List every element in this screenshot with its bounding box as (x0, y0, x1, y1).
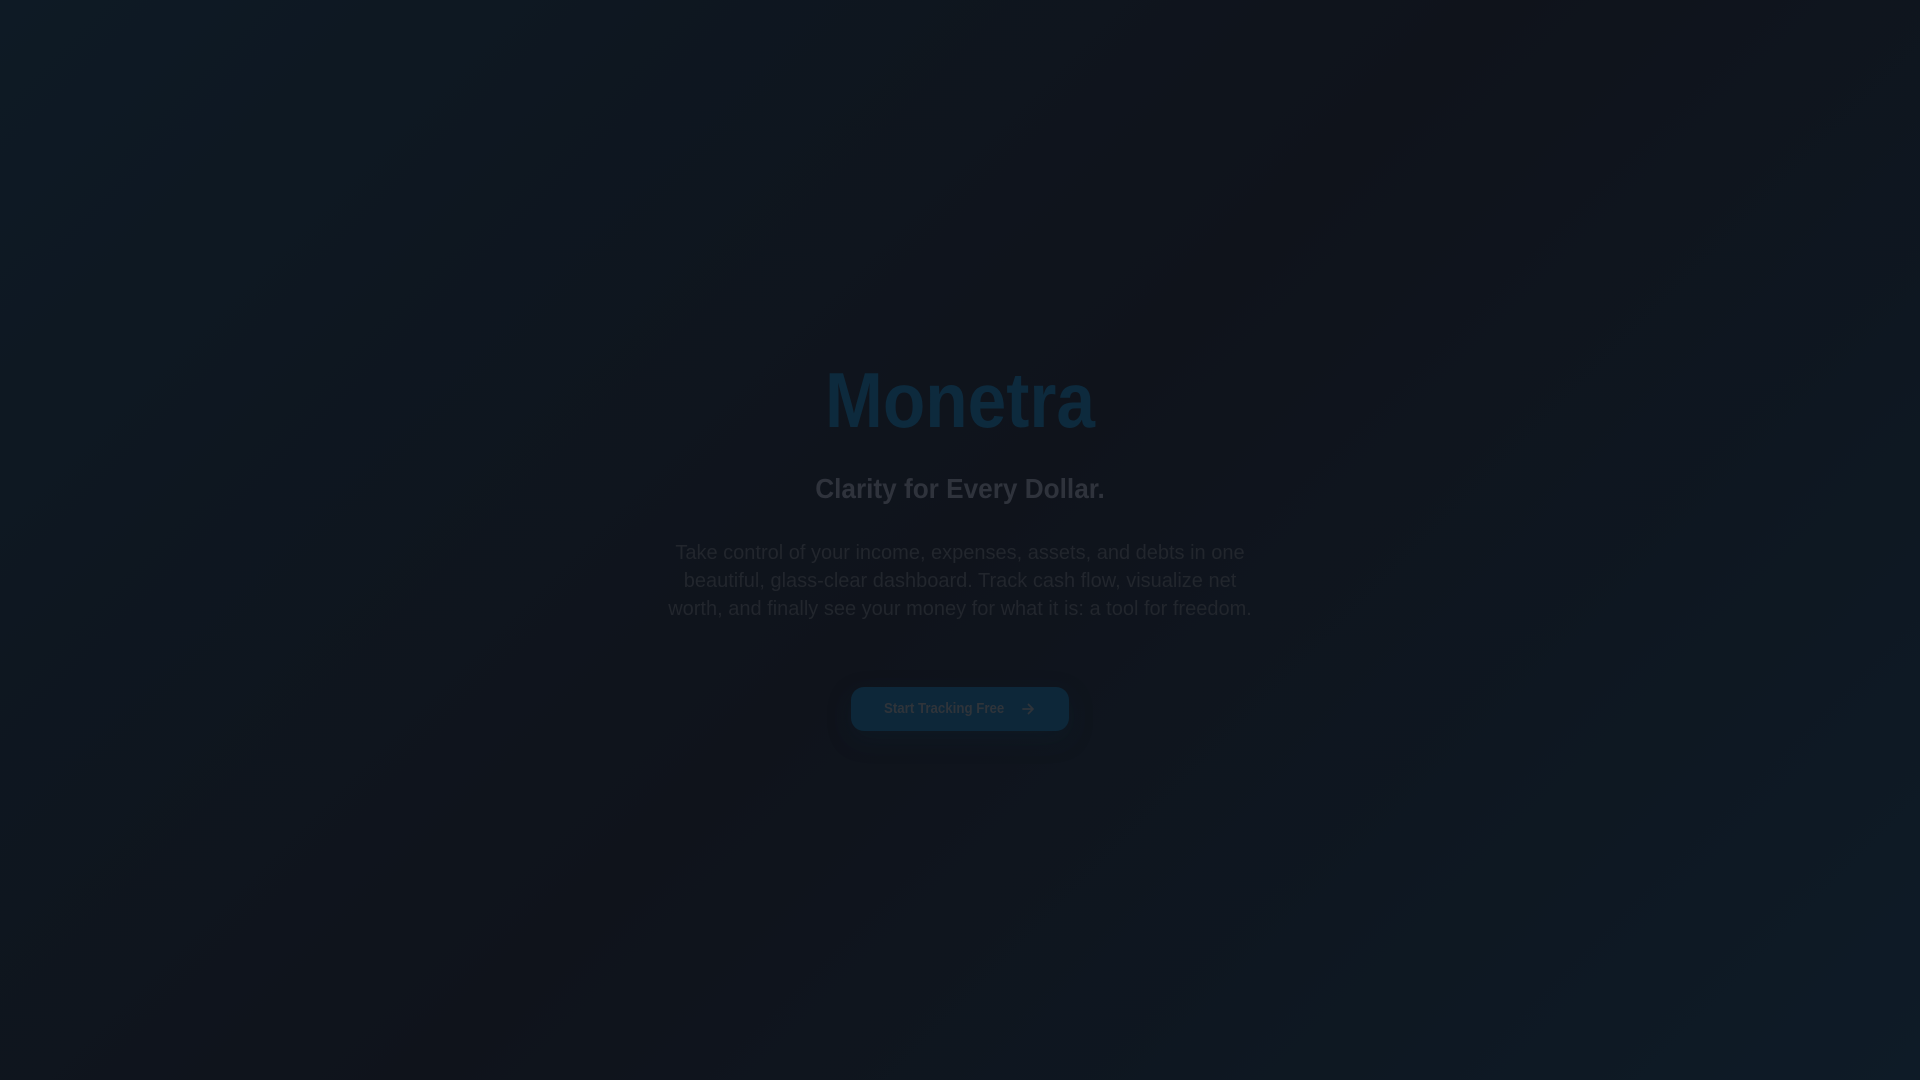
description text: beautiful, glass-clear dashboard. Track cash flow, visualize net (684, 570, 1236, 592)
description text (668, 542, 1252, 620)
button label: Start Tracking Free (884, 701, 1004, 717)
description text: worth, and finally see your money for what it is: a tool for freedom. (668, 598, 1252, 620)
call to action button (851, 687, 1069, 731)
tagline: Clarity for Every Dollar. (815, 473, 1105, 504)
icon: arrow (1022, 704, 1034, 714)
description text: Take control of your income, expenses, assets, and debts in one (675, 542, 1245, 564)
title: Monetra (825, 356, 1095, 444)
